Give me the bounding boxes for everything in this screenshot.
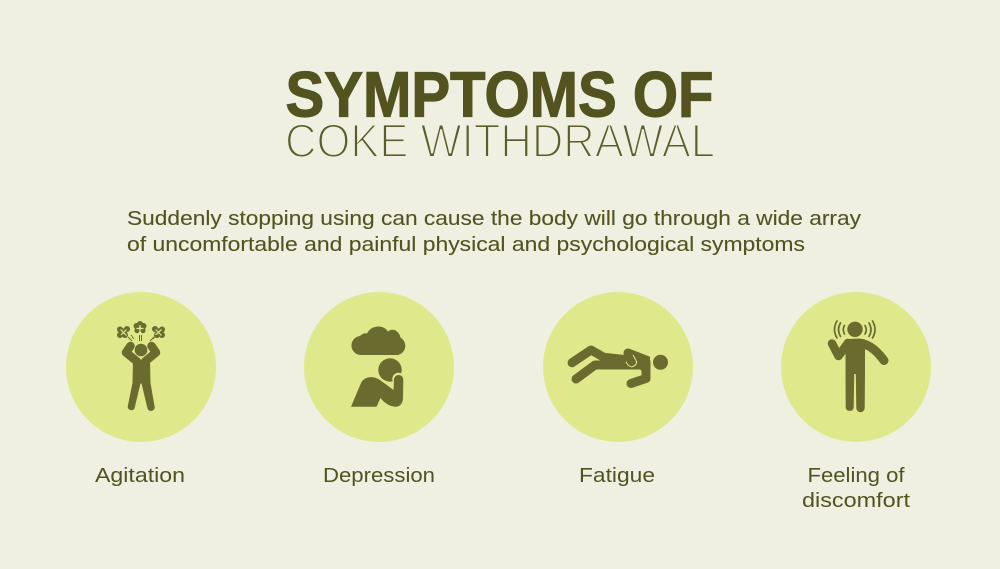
panel: agitation — [66, 292, 216, 442]
labels — [95, 465, 911, 512]
panel: depression — [304, 292, 454, 442]
label: fatigue: Fatigue — [579, 465, 655, 487]
panel: fatigue — [543, 292, 693, 442]
fatigue circle — [543, 292, 693, 442]
intro text — [127, 207, 862, 256]
label: agitation: Agitation — [95, 465, 185, 487]
label: feeling of discomfort: discomfort — [802, 490, 911, 512]
discomfort circle — [781, 292, 931, 442]
intro text: of uncomfortable and painful physical and psychological symptoms — [127, 233, 805, 256]
title: SYMPTOMS OF — [286, 58, 714, 130]
panel: feeling of discomfort — [781, 292, 931, 442]
icon: person under cloud — [351, 326, 405, 407]
label: feeling of discomfort: Feeling of — [808, 465, 905, 487]
title: COKE WITHDRAWAL — [285, 115, 715, 168]
depression circle — [304, 292, 454, 442]
icon: person with ringing head — [832, 321, 884, 412]
intro text: Suddenly stopping using can cause the body will go through a wide array — [127, 207, 862, 230]
title — [285, 58, 715, 168]
label: feeling of discomfort — [802, 465, 911, 512]
label: depression: Depression — [323, 465, 435, 487]
icon: person lying down — [572, 349, 668, 384]
icon: agitated person — [117, 321, 165, 411]
agitation circle — [66, 292, 216, 442]
